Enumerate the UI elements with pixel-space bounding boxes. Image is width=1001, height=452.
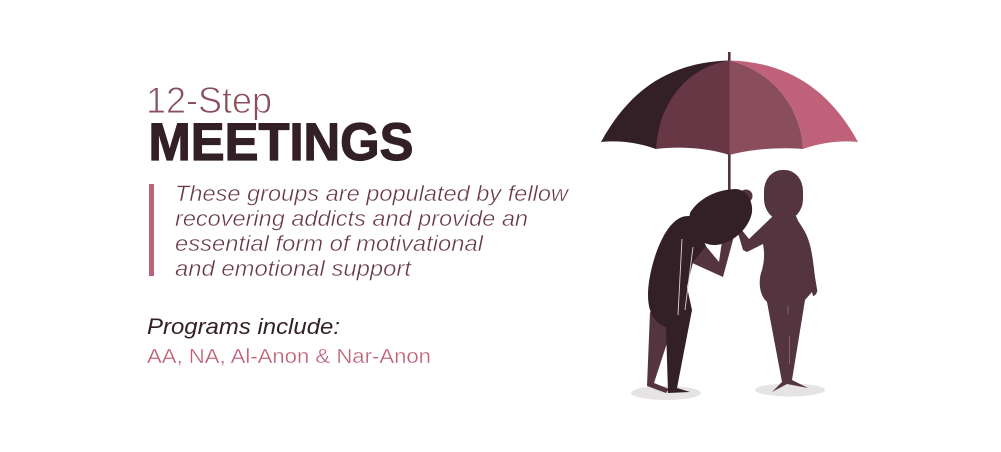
left person: hair bun: [740, 190, 752, 202]
left person: head: [689, 189, 752, 245]
description text block: essential form of motivational: [175, 231, 484, 256]
left person: back leg: [647, 312, 669, 393]
subheading: Programs include: Programs include:: [147, 314, 340, 339]
right person: highlight: [788, 306, 790, 364]
umbrella shaft: [728, 52, 731, 192]
canopy: far-left dark panel: [601, 60, 730, 149]
right person: head: [764, 170, 803, 220]
illustration: two people: [631, 170, 825, 400]
description text block: and emotional support: [175, 256, 412, 281]
accent bar: [149, 184, 154, 276]
title: 12-Step: 12-Step: [146, 79, 272, 121]
left person: arm: [690, 236, 734, 277]
left person: hair highlights: [678, 239, 693, 315]
programs list: AA, NA, Al-Anon & Nar-Anon: [147, 345, 431, 368]
ground shadow left: [631, 386, 701, 400]
canopy: left panel: [656, 60, 730, 155]
illustration: umbrella: [601, 52, 858, 192]
title: MEETINGS: MEETINGS: [148, 113, 414, 172]
description text block: These groups are populated by fellow: [175, 181, 570, 206]
right person: body: [738, 216, 817, 392]
ground shadow right: [755, 384, 825, 396]
left person: body and front leg: [648, 216, 706, 393]
canopy: right panel: [730, 60, 803, 155]
description text block: recovering addicts and provide an: [175, 206, 528, 231]
canopy: far-right pink panel: [730, 60, 858, 149]
description text block: [175, 181, 570, 281]
